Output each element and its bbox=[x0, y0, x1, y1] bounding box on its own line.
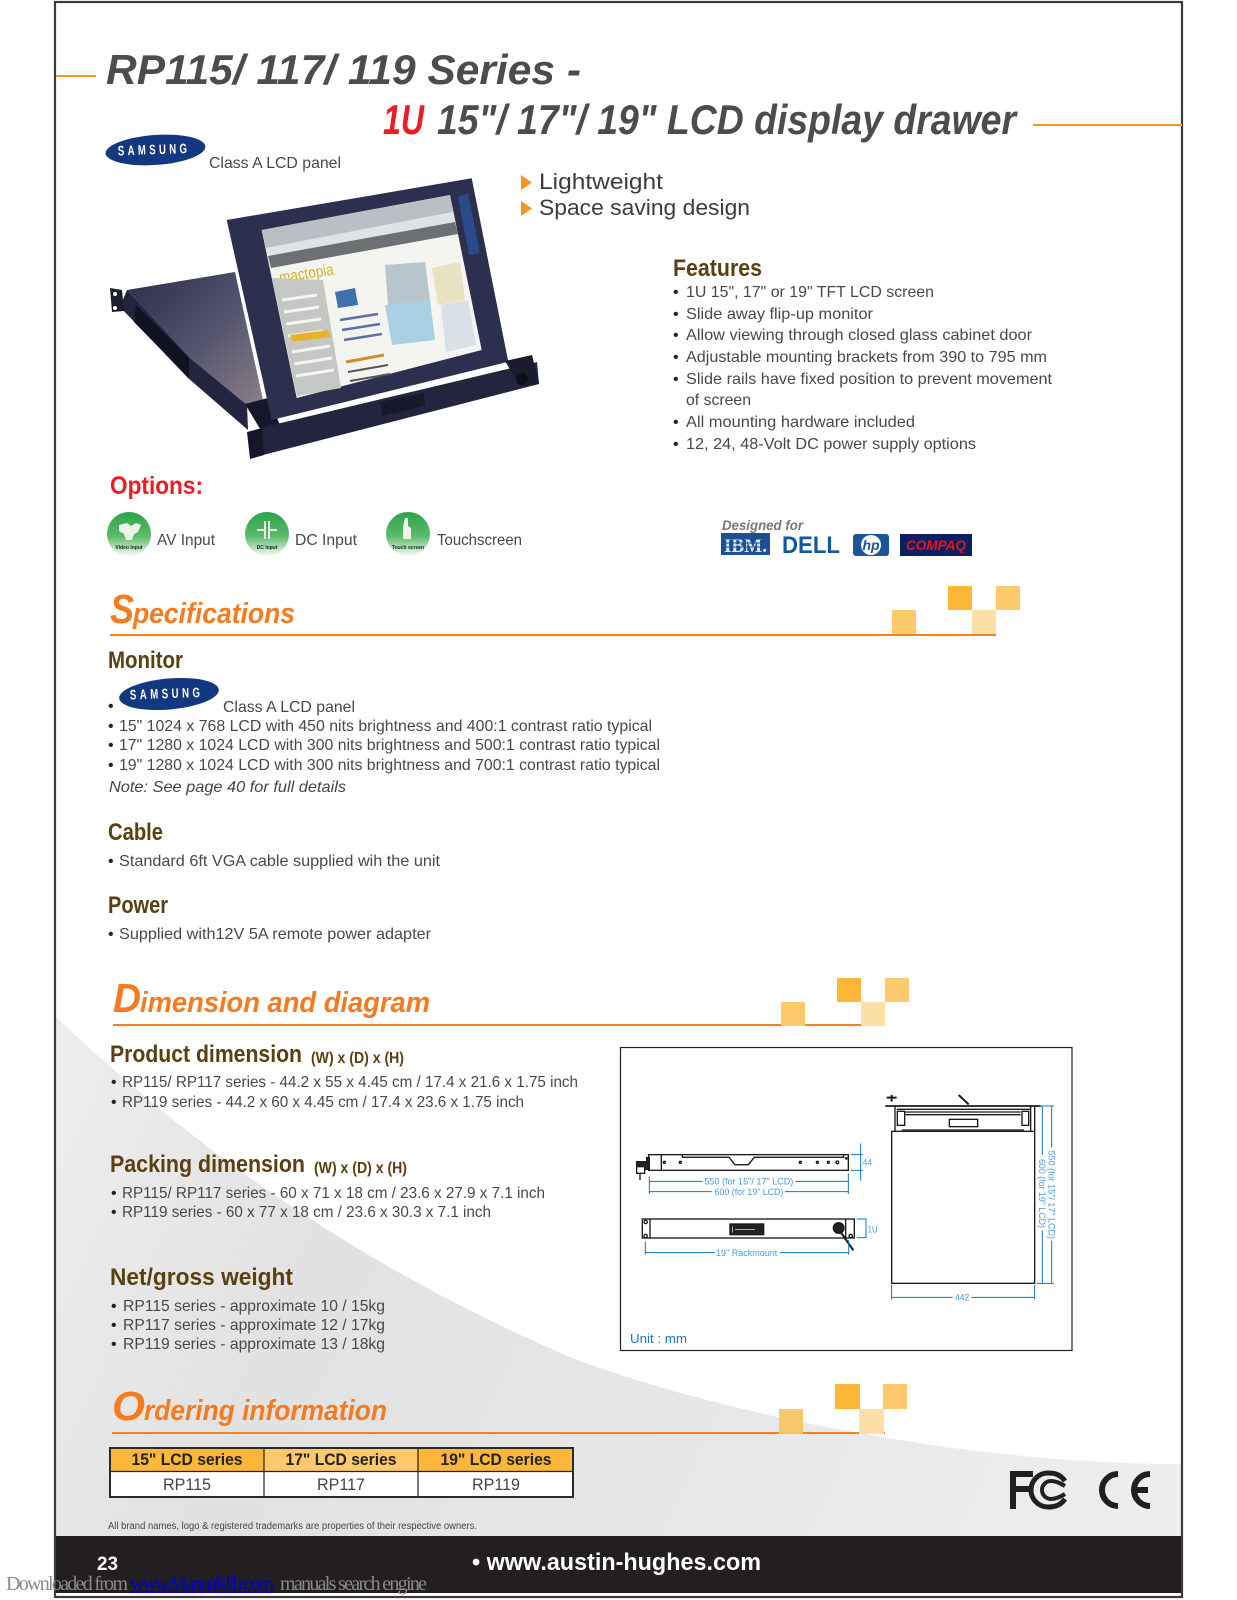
panel: features: All mounting hardware included bbox=[686, 414, 915, 431]
icon: Samsung logo with panel caption bbox=[105, 132, 341, 172]
icon: FCC mark bbox=[1013, 1473, 1065, 1509]
panel: net/gross weight: Net/gross weight bbox=[110, 1264, 293, 1291]
panel: monitor spec: Class A LCD panel bbox=[223, 699, 355, 716]
option: DC input: DC Input bbox=[295, 532, 358, 549]
panel: features: 12, 24, 48-Volt DC power supply options bbox=[686, 436, 976, 453]
brand logos: designed for: hp bbox=[862, 537, 880, 553]
download watermark: manuals search engine bbox=[280, 1573, 427, 1595]
panel: product dimension: RP115/ RP117 series - 44.2 x 55 x 4.45 cm / 17.4 x 21.6 x 1.75 inch bbox=[122, 1074, 578, 1091]
panel: monitor spec: Monitor bbox=[108, 647, 183, 674]
panel: features: • bbox=[673, 284, 679, 301]
title: 15"/ 17"/ 19" LCD display drawer bbox=[437, 96, 1018, 143]
ordering table: RP119 bbox=[472, 1475, 520, 1494]
footer band bbox=[56, 1536, 1181, 1593]
panel: cable spec: Standard 6ft VGA cable supplied wih the unit bbox=[119, 853, 441, 870]
dimension labels: 550 (for 15"/ 17" LCD) bbox=[1046, 1151, 1056, 1239]
dimension labels: 550 (for 15"/ 17" LCD) bbox=[704, 1177, 793, 1187]
icon: Samsung logo with panel caption: SAMSUNG bbox=[118, 140, 191, 159]
panel: product dimension: (W) x (D) x (H) bbox=[311, 1050, 404, 1067]
ordering table: 17" LCD series bbox=[286, 1450, 396, 1469]
heading: options: Options: bbox=[110, 472, 203, 500]
ordering table: RP115 bbox=[163, 1475, 211, 1494]
section heading: specifications: pecifications bbox=[132, 598, 295, 630]
panel: product dimension: Product dimension bbox=[110, 1041, 302, 1068]
panel: features: Features bbox=[673, 255, 762, 282]
dimension lines bbox=[645, 1106, 1054, 1299]
section heading: ordering information: O bbox=[112, 1383, 145, 1429]
panel: power spec: Power bbox=[108, 892, 168, 919]
ordering table bbox=[110, 1448, 573, 1497]
panel: product dimension: • bbox=[111, 1094, 117, 1111]
panel: features: • bbox=[673, 371, 679, 388]
panel: net/gross weight: RP115 series - approximate 10 / 15kg bbox=[123, 1298, 385, 1315]
panel: packing dimension: (W) x (D) x (H) bbox=[314, 1160, 407, 1177]
panel: packing dimension: RP115/ RP117 series - 60 x 71 x 18 cm / 23.6 x 27.9 x 7.1 inch bbox=[122, 1185, 545, 1202]
panel: power spec bbox=[108, 892, 432, 943]
panel: power spec: • bbox=[108, 926, 114, 943]
footer band: • www.austin-hughes.com bbox=[472, 1549, 761, 1576]
brand logos: designed for: DELL bbox=[782, 532, 840, 559]
dimension labels: 600 (for 19" LCD) bbox=[715, 1187, 783, 1197]
section heading: dimension and diagram: imension and diagram bbox=[140, 987, 430, 1019]
footer band: 23 bbox=[97, 1554, 118, 1575]
download watermark: Downloaded from bbox=[6, 1573, 128, 1595]
dimension labels: 19" Rackmount bbox=[716, 1248, 778, 1258]
panel: packing dimension: • bbox=[111, 1204, 117, 1221]
product photo: LCD drawer bbox=[110, 178, 539, 459]
unit note: Unit : mm bbox=[630, 1331, 687, 1346]
option: DC input: DC Input bbox=[257, 545, 278, 551]
key benefits: Space saving design bbox=[539, 195, 750, 220]
download watermark: www.Manualslib.com bbox=[130, 1573, 274, 1595]
icon: Samsung logo with panel caption: Class A LCD panel bbox=[209, 155, 341, 172]
option: AV input: AV Input bbox=[157, 532, 216, 549]
panel: features: Adjustable mounting brackets from 390 to 795 mm bbox=[686, 349, 1047, 366]
ordering table: 15" LCD series bbox=[132, 1450, 242, 1469]
panel: features: • bbox=[673, 327, 679, 344]
section heading: specifications: S bbox=[110, 586, 134, 632]
panel: net/gross weight: • bbox=[111, 1336, 117, 1353]
panel: features: Slide away flip-up monitor bbox=[686, 306, 874, 323]
panel: power spec: Supplied with12V 5A remote power adapter bbox=[119, 926, 432, 943]
panel: features: 1U 15", 17" or 19" TFT LCD screen bbox=[686, 284, 934, 301]
option: AV input bbox=[107, 512, 216, 556]
panel: features: Allow viewing through closed glass cabinet door bbox=[686, 327, 1033, 344]
section heading: dimension and diagram bbox=[113, 975, 909, 1026]
section heading: specifications bbox=[110, 586, 1020, 636]
dimension labels: 600 (for 19" LCD) bbox=[1037, 1159, 1047, 1228]
brand logos: designed for: COMPAQ bbox=[906, 537, 966, 553]
panel: features: • bbox=[673, 349, 679, 366]
panel: monitor spec: • bbox=[108, 757, 114, 774]
dimension labels bbox=[704, 1151, 1056, 1303]
panel: monitor spec: 15" 1024 x 768 LCD with 450 nits brightness and 400:1 contrast ratio typical bbox=[119, 718, 652, 735]
option: DC input bbox=[245, 512, 358, 556]
option: touchscreen: Touch screen bbox=[392, 545, 424, 551]
panel: features: • bbox=[673, 436, 679, 453]
panel: cable spec bbox=[108, 819, 441, 870]
panel: monitor spec: • bbox=[108, 737, 114, 754]
option: touchscreen: Touchscreen bbox=[437, 532, 522, 549]
title: RP115/ 117/ 119 Series - bbox=[106, 46, 581, 93]
trademark note: All brand names, logo & registered trademarks are properties of their respective owners. bbox=[108, 1521, 477, 1532]
panel: net/gross weight bbox=[110, 1264, 385, 1353]
section heading: dimension and diagram: D bbox=[113, 975, 141, 1021]
panel: features: of screen bbox=[686, 392, 751, 409]
product photo: LCD drawer: mactopia bbox=[278, 262, 335, 287]
panel: packing dimension: Packing dimension bbox=[110, 1151, 305, 1178]
section heading: ordering information bbox=[112, 1383, 907, 1434]
background swoosh bbox=[56, 1017, 1182, 1536]
dimension labels: 44 bbox=[863, 1158, 872, 1168]
ordering table: 19" LCD series bbox=[440, 1450, 552, 1469]
panel: monitor spec: 17" 1280 x 1024 LCD with 300 nits brightness and 500:1 contrast ratio typical bbox=[119, 737, 660, 754]
panel: product dimension: • bbox=[111, 1074, 117, 1091]
front view drawing bbox=[642, 1219, 854, 1250]
panel: net/gross weight: RP117 series - approximate 12 / 17kg bbox=[123, 1317, 385, 1334]
icon: CE mark bbox=[1102, 1474, 1150, 1506]
panel: net/gross weight: • bbox=[111, 1298, 117, 1315]
panel: features: Slide rails have fixed position to prevent movement bbox=[686, 371, 1053, 388]
ordering table: RP117 bbox=[317, 1475, 365, 1494]
key benefits bbox=[521, 169, 750, 220]
panel: product dimension bbox=[110, 1041, 578, 1111]
download watermark bbox=[6, 1573, 427, 1595]
panel: monitor spec: Note: See page 40 for full details bbox=[109, 779, 346, 796]
side view drawing bbox=[637, 1155, 848, 1180]
title bbox=[56, 46, 1182, 143]
top view drawing bbox=[885, 1095, 1041, 1283]
panel: cable spec: Cable bbox=[108, 819, 163, 846]
panel: features: • bbox=[673, 414, 679, 431]
panel: net/gross weight: • bbox=[111, 1317, 117, 1334]
panel: packing dimension bbox=[110, 1151, 545, 1221]
key benefits: Lightweight bbox=[539, 169, 663, 194]
panel: features: • bbox=[673, 306, 679, 323]
option: touchscreen bbox=[386, 512, 522, 556]
panel: product dimension: RP119 series - 44.2 x 60 x 4.45 cm / 17.4 x 23.6 x 1.75 inch bbox=[122, 1094, 524, 1111]
panel: monitor spec: SAMSUNG bbox=[130, 684, 204, 703]
panel: monitor spec: • bbox=[108, 698, 114, 715]
panel: packing dimension: RP119 series - 60 x 77 x 18 cm / 23.6 x 30.3 x 7.1 inch bbox=[122, 1204, 491, 1221]
panel: monitor spec: • bbox=[108, 718, 114, 735]
dimension labels: 442 bbox=[955, 1293, 969, 1303]
panel: features bbox=[673, 255, 1053, 453]
panel: cable spec: • bbox=[108, 853, 114, 870]
brand logos: designed for: Designed for bbox=[722, 517, 804, 533]
dimension labels: 1U bbox=[868, 1225, 878, 1235]
technical diagram panel bbox=[620, 1048, 1072, 1350]
panel: monitor spec bbox=[108, 647, 660, 796]
panel: packing dimension: • bbox=[111, 1185, 117, 1202]
panel: monitor spec: 19" 1280 x 1024 LCD with 300 nits brightness and 700:1 contrast ratio typical bbox=[119, 757, 660, 774]
section heading: ordering information: rdering information bbox=[144, 1395, 387, 1427]
option: AV input: Video Input bbox=[115, 545, 143, 551]
title: 1U bbox=[383, 96, 425, 143]
brand logos: designed for: IBM. bbox=[724, 535, 767, 557]
brand logos: designed for bbox=[721, 517, 972, 559]
panel: net/gross weight: RP119 series - approximate 13 / 18kg bbox=[123, 1336, 385, 1353]
